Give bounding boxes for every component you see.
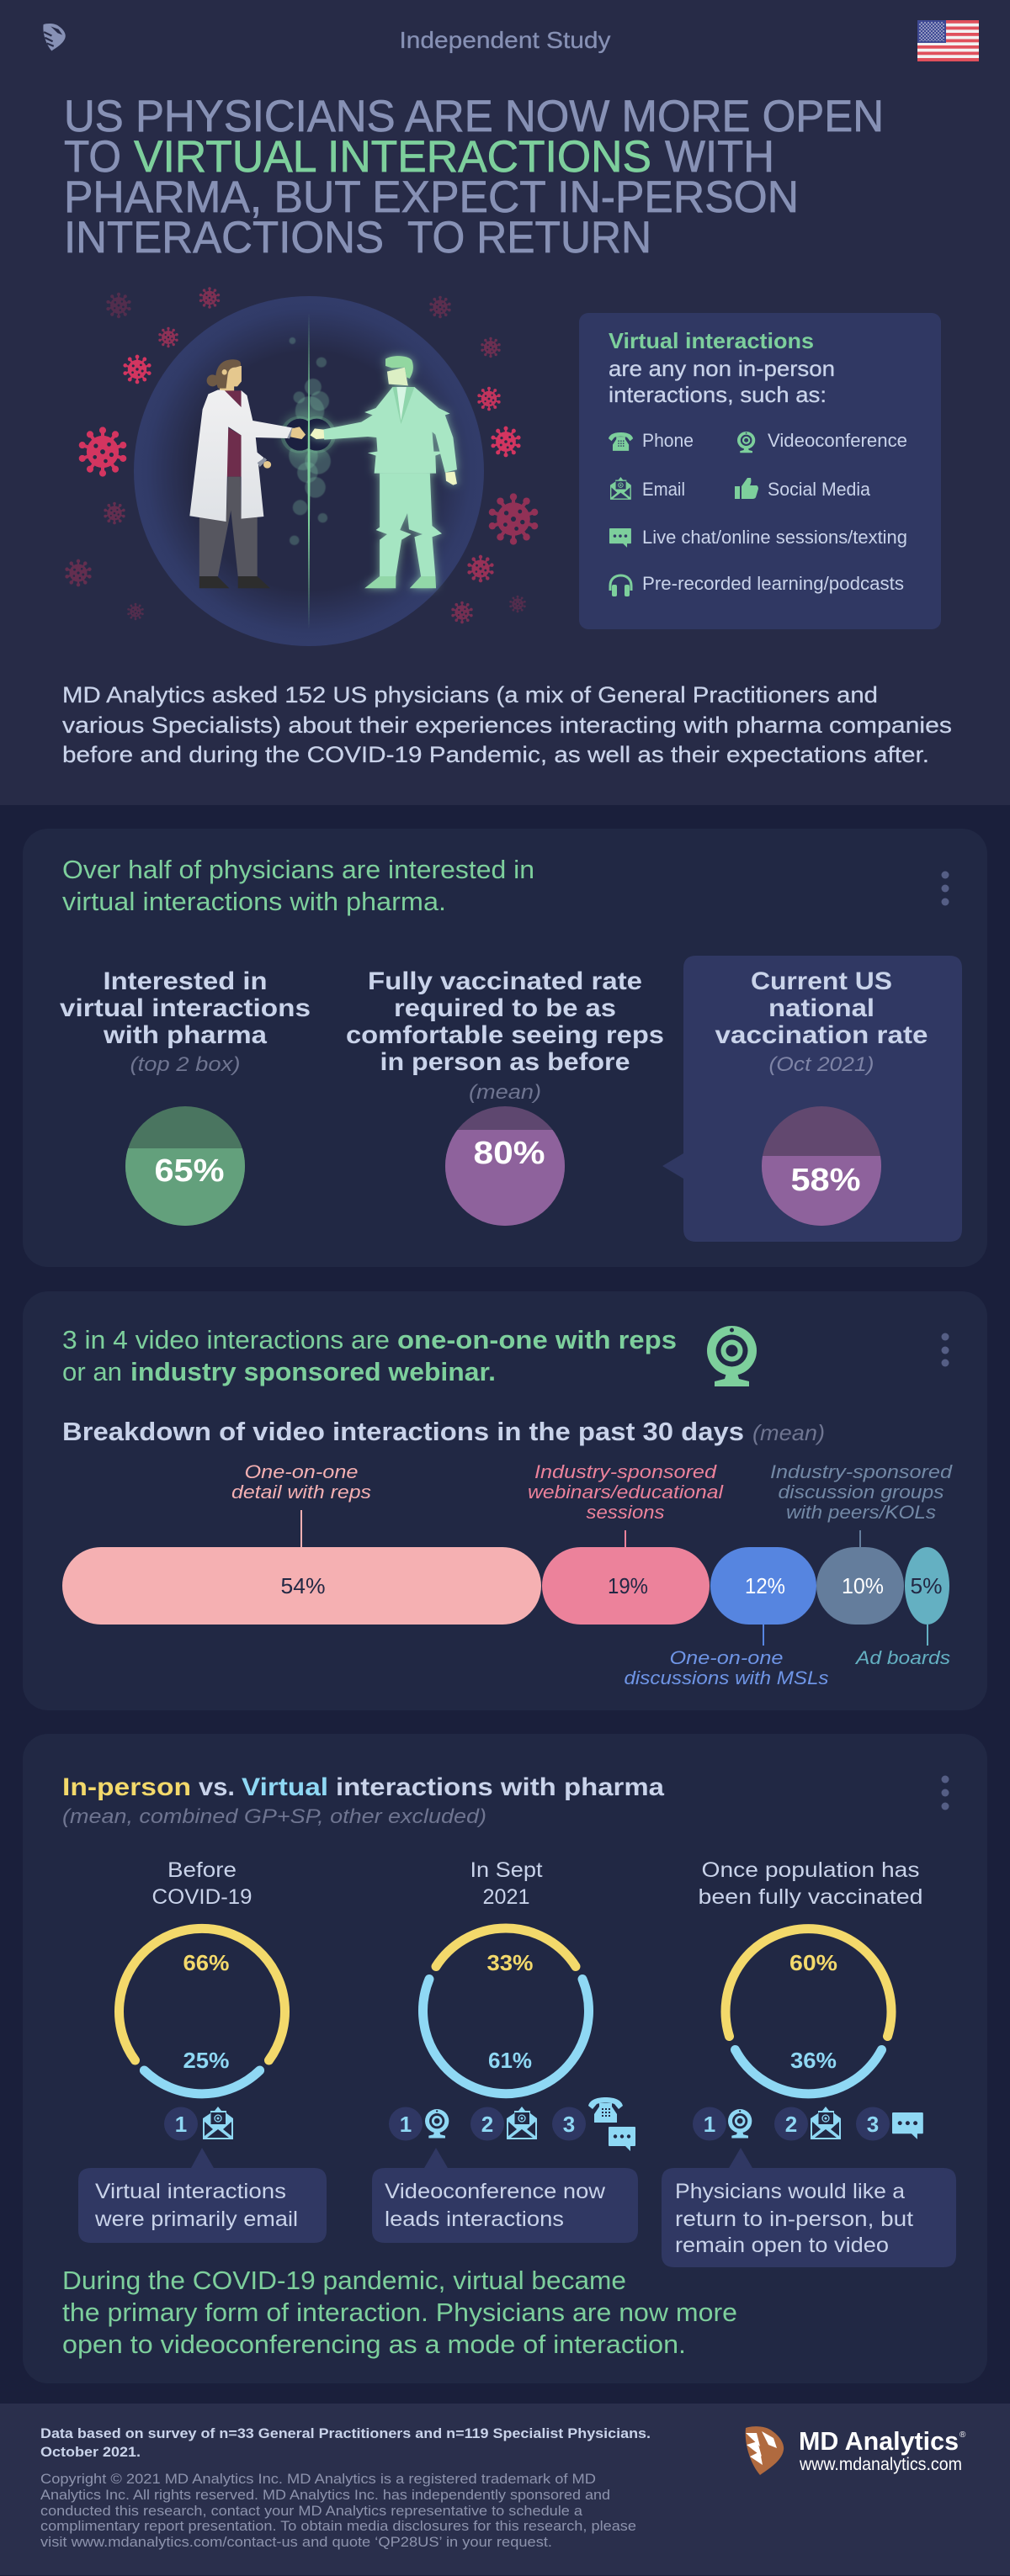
callout: current national vaccination rate: (Oct 2021) [769, 1053, 874, 1076]
callout: videoconference leads: Videoconference now [385, 2180, 606, 2203]
column: before COVID-19: Before [167, 1858, 237, 1882]
ranking: email first: 1 [175, 2112, 187, 2137]
icon: headphones [610, 575, 631, 596]
panel: video interactions breakdown [23, 1291, 987, 1710]
definition text: are any non in-person [609, 356, 835, 381]
icon: email [610, 477, 631, 500]
title: US PHYSICIANS ARE NOW MORE OPEN [64, 92, 884, 141]
ranking: video, email, chat: 2 [785, 2112, 797, 2137]
takeaway text: open to videoconferencing as a mode of interaction. [62, 2330, 686, 2359]
protective orb [134, 296, 484, 646]
header label: Independent Study: Independent Study [399, 27, 611, 53]
column: in Sept 2021 [372, 1858, 638, 2243]
column: required vaccination rate: in person as before [380, 1048, 630, 1076]
title: PHARMA, BUT EXPECT IN-PERSON [64, 172, 799, 222]
column: interested in virtual interactions: with pharma [103, 1021, 267, 1049]
panel: interest and vaccination [23, 829, 987, 1267]
panel heading: virtual interactions with pharma. [62, 887, 446, 916]
doctor in white coat [189, 359, 306, 588]
logo mark [746, 2426, 784, 2475]
donut chart: 66% in-person, 25% virtual: 66% [183, 1950, 229, 1975]
column: required vaccination rate: Fully vaccinated rate [368, 967, 642, 995]
stacked pill chart [62, 1461, 953, 1688]
intro paragraph: before and during the COVID-19 Pandemic, as well as their expectations after. [62, 742, 929, 767]
donut chart: 60% in-person, 36% virtual: 36% [790, 2048, 837, 2073]
methodology note: Data based on survey of n=33 General Practitioners and n=119 Specialist Physicians. [40, 2425, 651, 2441]
segment: one-on-one detail with reps 54%: detail with reps [231, 1481, 371, 1503]
list of virtual channels: Pre-recorded learning/podcasts [642, 573, 904, 594]
MD Analytics logo [746, 2426, 966, 2475]
column: before COVID-19: COVID-19 [152, 1885, 252, 1909]
callout: primarily email: were primarily email [94, 2208, 298, 2231]
title: WITH [665, 132, 774, 182]
copyright notice: complimentary report presentation. To obtain media disclosures for this research, please [40, 2518, 636, 2534]
icon: thumbs up [735, 478, 758, 499]
callout: return to in-person: Physicians would like a [675, 2180, 905, 2203]
copyright notice [40, 2471, 636, 2550]
ranking: video, email, phone and chat: 1 [400, 2112, 412, 2137]
list of virtual channels [609, 430, 907, 596]
takeaway text: the primary form of interaction. Physicians are now more [62, 2298, 737, 2327]
gauge: 58% [762, 1106, 881, 1226]
icon: webcam [737, 432, 755, 453]
column: once population vaccinated [662, 1858, 956, 2267]
logo wordmark: MD Analytics [799, 2426, 959, 2456]
column: before COVID-19 [78, 1858, 327, 2243]
segment: one-on-one detail with reps 54% [62, 1461, 541, 1625]
donut chart: 60% in-person, 36% virtual [726, 1929, 891, 2094]
copyright notice: visit www.mdanalytics.com/contact-us and quote ‘QP28US’ in your request. [40, 2534, 552, 2550]
definition text: interactions, such as: [609, 382, 827, 407]
menu dots [941, 872, 949, 905]
copyright notice: Analytics Inc. All rights reserved. MD Analytics Inc. has independently sponsored and [40, 2487, 610, 2503]
callout: return to in-person: return to in-person, but [675, 2208, 913, 2231]
logo url: www.mdanalytics.com [799, 2455, 962, 2474]
column: interested in virtual interactions: Interested in [103, 967, 268, 995]
title: TO RETURN [407, 213, 651, 262]
takeaway text [62, 2266, 737, 2359]
segment: industry-sponsored webinars 19%: sessions [586, 1502, 665, 1523]
callout: current national vaccination rate: national [768, 994, 874, 1022]
callout: return to in-person: remain open to video [675, 2234, 889, 2257]
donut chart: 60% in-person, 36% virtual: 60% [789, 1950, 837, 1975]
column: required vaccination rate: comfortable seeing reps [346, 1021, 664, 1049]
panel heading [62, 1325, 677, 1386]
ranking: video, email, phone and chat: 2 [481, 2112, 493, 2137]
panel heading: Virtual [242, 1773, 328, 1801]
copyright notice: conducted this research, contact your MD Analytics representative to schedule a [40, 2503, 583, 2519]
list of virtual channels: Email [642, 479, 685, 500]
icon: webcam [707, 1326, 757, 1386]
panel heading [62, 855, 534, 916]
panel heading: or an [62, 1357, 122, 1386]
callout: videoconference leads [372, 2148, 638, 2243]
panel heading [62, 1773, 664, 1801]
green particles [289, 337, 331, 545]
donut chart: 66% in-person, 25% virtual: 25% [183, 2048, 229, 2073]
segment: discussion groups with peers 10%: with peers/KOLs [786, 1502, 936, 1523]
segment: discussion groups with peers 10%: 10% [842, 1573, 884, 1598]
list of virtual channels: Phone [642, 430, 694, 451]
panel heading: industry sponsored webinar. [130, 1357, 496, 1386]
column: interested in virtual interactions: (top 2 box) [130, 1053, 241, 1076]
segment: ad boards 5% [854, 1547, 950, 1668]
column: once population vaccinated: been fully vaccinated [699, 1885, 922, 1909]
chart heading: (mean) [752, 1420, 825, 1445]
column: interested in virtual interactions: virtual interactions [60, 994, 311, 1022]
segment: discussions with MSLs 12%: One-on-one [670, 1647, 783, 1668]
methodology note: October 2021. [40, 2444, 141, 2460]
ranking: video, email, phone and chat [389, 2097, 635, 2151]
segment: one-on-one detail with reps 54%: One-on-one [244, 1461, 359, 1482]
icon: phone [609, 432, 633, 451]
segment: discussion groups with peers 10%: discussion groups [778, 1481, 944, 1503]
callout: current national vaccination rate: Current US [751, 967, 892, 995]
gauge: 80% [445, 1106, 565, 1226]
panel heading: vs. [199, 1773, 235, 1801]
icon: chat [609, 528, 631, 548]
donut chart: 66% in-person, 25% virtual [120, 1928, 285, 2094]
ranking: video, email, phone and chat: 3 [563, 2112, 575, 2137]
registered mark: ® [960, 2430, 966, 2440]
gauge: 80%: 80% [473, 1136, 545, 1171]
callout: current national vaccination rate: vaccination rate [715, 1021, 928, 1049]
donut chart: 33% in-person, 61% virtual: 61% [488, 2048, 532, 2073]
segment: discussion groups with peers 10%: Industry-sponsored [770, 1461, 953, 1482]
gauge: 58%: 58% [791, 1163, 860, 1198]
ranking: email first [164, 2107, 233, 2140]
panel: in-person vs virtual [23, 1734, 987, 2383]
title: TO [64, 132, 121, 182]
column: interested in virtual interactions [60, 967, 311, 1226]
callout: primarily email: Virtual interactions [95, 2180, 286, 2203]
title: VIRTUAL INTERACTIONS [134, 132, 651, 182]
panel heading: 3 in 4 video interactions are [62, 1325, 390, 1354]
ranking: video, email, chat [693, 2107, 923, 2140]
segment: ad boards 5%: 5% [911, 1573, 943, 1598]
intro paragraph: MD Analytics asked 152 US physicians (a mix of General Practitioners and [62, 682, 878, 708]
column: required vaccination rate: required to be as [394, 994, 616, 1022]
ranking: video, email, chat: 3 [867, 2112, 879, 2137]
menu dots [941, 1775, 949, 1810]
column: in Sept 2021: 2021 [483, 1885, 530, 1909]
segment: discussions with MSLs 12%: 12% [745, 1573, 785, 1598]
menu dots [941, 1333, 949, 1366]
callout: videoconference leads: leads interactions [385, 2208, 564, 2231]
callout: primarily email [78, 2148, 327, 2243]
icon: US flag [917, 20, 979, 61]
segment: industry-sponsored webinars 19%: webinars/educational [528, 1481, 724, 1503]
panel heading: Over half of physicians are interested in [62, 855, 534, 884]
footer [0, 2404, 1010, 2575]
segment: discussions with MSLs 12%: discussions with MSLs [625, 1667, 828, 1688]
title [64, 92, 884, 262]
callout: return to in-person [662, 2148, 956, 2267]
donut chart: 33% in-person, 61% virtual [423, 1928, 589, 2094]
column: required vaccination rate [346, 967, 664, 1226]
list of virtual channels: Social Media [768, 479, 871, 500]
definition text [609, 328, 835, 407]
panel heading: one-on-one with reps [397, 1325, 677, 1354]
segment: industry-sponsored webinars 19%: 19% [608, 1573, 648, 1598]
glowing virtual rep [310, 356, 457, 588]
definition text: Virtual interactions [609, 328, 814, 353]
list of virtual channels: Videoconference [768, 430, 907, 451]
takeaway text: During the COVID-19 pandemic, virtual became [62, 2266, 626, 2295]
handshake portal [280, 411, 336, 458]
panel subheading: (mean, combined GP+SP, other excluded) [62, 1805, 486, 1828]
segment: discussion groups with peers 10% [770, 1461, 953, 1625]
panel: virtual interactions definition [579, 313, 941, 629]
segment: discussions with MSLs 12% [625, 1547, 828, 1688]
donut chart: 33% in-person, 61% virtual: 33% [486, 1950, 534, 1975]
chart heading: Breakdown of video interactions in the past 30 days [62, 1417, 744, 1446]
illustration: doctor and virtual rep handshake inside protective orb [65, 287, 538, 646]
gauge: 65%: 65% [155, 1153, 224, 1189]
ranking: video, email, chat: 1 [704, 2112, 715, 2137]
header logo mark [43, 24, 66, 50]
segment: industry-sponsored webinars 19% [528, 1461, 724, 1625]
figures drawn in illustration space [189, 337, 457, 588]
surrounding virus particles [65, 287, 538, 623]
panel heading: interactions with pharma [336, 1773, 664, 1801]
methodology note [40, 2425, 651, 2460]
intro paragraph: various Specialists) about their experiences interacting with pharma companies [62, 713, 952, 738]
column: once population vaccinated: Once population has [702, 1858, 919, 1882]
divider beam [308, 313, 310, 629]
segment: ad boards 5%: Ad boards [854, 1647, 950, 1668]
copyright notice: Copyright © 2021 MD Analytics Inc. MD Analytics is a registered trademark of MD [40, 2471, 596, 2487]
intro paragraph [62, 682, 952, 767]
panel heading: In-person [62, 1773, 191, 1801]
column: in Sept 2021: In Sept [470, 1858, 543, 1882]
title: INTERACTIONS [64, 213, 384, 262]
segment: one-on-one detail with reps 54%: 54% [281, 1573, 325, 1598]
callout: current national vaccination rate [662, 956, 962, 1242]
gauge: 65% [125, 1106, 245, 1226]
column: required vaccination rate: (mean) [469, 1081, 541, 1104]
list of virtual channels: Live chat/online sessions/texting [642, 527, 907, 548]
segment: industry-sponsored webinars 19%: Industry-sponsored [534, 1461, 717, 1482]
